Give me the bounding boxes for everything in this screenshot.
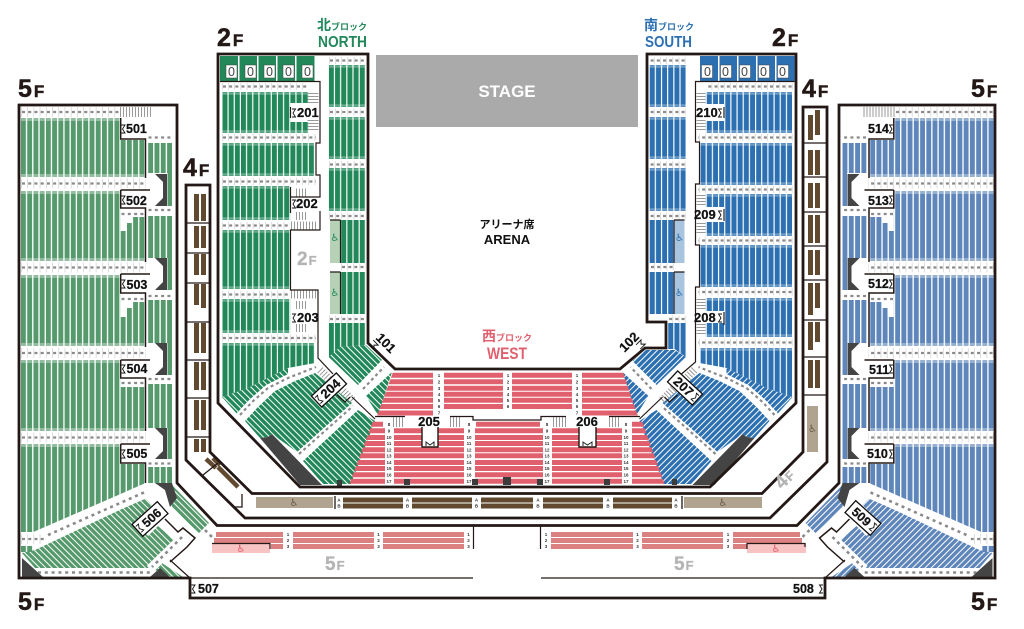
south 2F upper diagonal seats <box>726 368 792 415</box>
label 506: 506 <box>139 506 164 530</box>
west row numbers: 9 <box>625 428 628 434</box>
west row numbers: 8 <box>388 422 391 427</box>
north 2F column four <box>329 65 366 357</box>
west lower rows <box>340 424 670 481</box>
label 507: 507 <box>198 582 219 596</box>
north 2F seat number rows <box>222 60 385 456</box>
west stairs <box>393 417 621 427</box>
5F row numbers: 3 <box>377 544 380 549</box>
4F south accessible area <box>807 406 818 452</box>
west row numbers: 6 <box>507 404 510 409</box>
5F accessible area left <box>212 543 270 553</box>
5F row numbers: 3 <box>727 544 730 549</box>
5F pink rows <box>214 534 802 546</box>
west block heading: WEST <box>487 344 527 363</box>
west row numbers: 5 <box>576 398 579 403</box>
west row numbers: 11 <box>467 441 472 446</box>
4F accessible area left <box>256 497 333 508</box>
floor label 2F south: 2F <box>772 24 798 52</box>
label 205: 205 <box>418 414 440 429</box>
label 207: 207 <box>670 374 697 400</box>
south 5F dark wedges <box>838 174 992 577</box>
west row numbers: 13 <box>386 454 392 458</box>
south 2F top boxes band <box>700 56 794 81</box>
gate 206 cutout <box>579 427 596 447</box>
south 5F inner lines <box>820 118 894 562</box>
west block heading <box>482 328 532 363</box>
south 2F accessible areas <box>674 220 684 314</box>
4F row letters: B <box>475 504 479 508</box>
zero labels south: 0 <box>760 65 767 79</box>
west row numbers: 16 <box>623 472 629 478</box>
west row numbers: 10 <box>544 435 550 440</box>
5F row numbers: 1 <box>287 532 290 537</box>
west upper rows <box>370 375 645 413</box>
grey floor label 5F right: 5F <box>674 554 694 575</box>
arena label: アリーナ席 <box>480 217 534 231</box>
5F row numbers: 2 <box>545 538 548 543</box>
west row numbers: 4 <box>507 392 510 397</box>
label 209: 209 <box>694 207 716 222</box>
west row numbers: 1 <box>438 373 441 378</box>
west row numbers: 14 <box>466 460 472 465</box>
label 509 <box>845 501 881 535</box>
label 506 <box>132 502 168 536</box>
north 5F side columns <box>148 143 172 483</box>
west row numbers: 5 <box>438 398 441 403</box>
4F north diagonal seats <box>206 458 238 487</box>
4F accessible area right <box>684 497 762 508</box>
south block heading: SOUTH <box>645 34 692 51</box>
west row numbers: 14 <box>623 460 629 465</box>
north 5F inner lines <box>121 118 195 562</box>
label 510: 510 <box>867 447 888 461</box>
north 2F main columns <box>222 92 315 397</box>
4F row end lines <box>335 496 682 509</box>
floor label 5F bottom left: 5F <box>18 588 44 616</box>
5F row numbers: 2 <box>636 538 639 543</box>
wheelchair icons: ♿ <box>719 498 727 509</box>
5F row numbers: 1 <box>727 532 730 537</box>
zero labels south: 0 <box>704 65 711 79</box>
west row numbers: 10 <box>386 435 392 440</box>
label 101: 101 <box>373 330 399 356</box>
west row numbers: 6 <box>438 404 441 409</box>
4F row letters: A <box>475 498 479 502</box>
west row numbers: 17 <box>386 479 392 484</box>
west row numbers: 12 <box>466 448 472 452</box>
label 514: 514 <box>868 122 889 136</box>
west row numbers: 3 <box>576 386 579 391</box>
panel: north 5F seats <box>21 112 214 577</box>
4F row letters: B <box>674 504 678 508</box>
label 508 <box>793 582 823 596</box>
south 2F main columns <box>700 92 792 397</box>
wheelchair icons: ♿ <box>675 288 684 299</box>
west row numbers: 9 <box>388 428 391 434</box>
west row numbers: 15 <box>466 466 472 471</box>
west row numbers: 10 <box>466 435 472 440</box>
west row numbers: 5 <box>507 398 510 403</box>
zero labels south: 0 <box>741 65 748 79</box>
4F row letters: B <box>536 504 540 508</box>
south 2F lower diagonal seats <box>622 350 770 484</box>
arena label <box>480 217 534 247</box>
4F row letters: A <box>406 498 410 502</box>
west row numbers: 12 <box>544 448 550 452</box>
floor label 5F top left: 5F <box>18 75 44 103</box>
north block heading: 北ブロック <box>317 17 367 33</box>
5F accessible area right <box>747 543 806 553</box>
label 102: 102 <box>616 329 642 355</box>
4F brown rows <box>343 500 672 506</box>
north 5F diagonal block <box>22 485 209 577</box>
4F north brown columns <box>196 194 204 452</box>
label 509: 509 <box>849 505 874 529</box>
west row numbers: 7 <box>576 410 579 416</box>
5F row numbers: 2 <box>377 538 380 543</box>
4F row letters: A <box>606 498 610 502</box>
north 2F top boxes band <box>220 56 314 81</box>
west row numbers: 11 <box>545 441 550 446</box>
north 2F dark wedge <box>260 434 322 485</box>
label 206: 206 <box>576 414 598 429</box>
west row numbers: 1 <box>576 373 579 378</box>
west row numbers: 8 <box>625 422 628 427</box>
north 5F seat number rows <box>21 112 214 572</box>
north 2F upper diagonal seats <box>222 368 288 415</box>
4F north dividers <box>186 223 242 507</box>
label 508: 508 <box>793 582 814 596</box>
west row numbers: 8 <box>468 422 471 427</box>
wheelchair icons: ♿ <box>290 498 298 509</box>
floor label 4F left: 4F <box>183 154 209 182</box>
4F south dividers <box>803 143 827 395</box>
west row numbers: 17 <box>466 479 472 484</box>
north 2F zero boxes <box>226 65 313 78</box>
4F row letters: B <box>337 504 341 508</box>
south 2F dark wedge <box>692 434 754 485</box>
panel: south 2F seats <box>622 56 794 485</box>
floor label 5F bottom right: 5F <box>971 588 997 616</box>
west row numbers: 6 <box>576 404 579 409</box>
west row numbers: 11 <box>624 441 629 446</box>
stage <box>376 55 638 127</box>
5F row numbers: 3 <box>636 544 639 549</box>
west block lines <box>375 416 640 420</box>
floor label 4F right: 4F <box>802 75 828 103</box>
arena label: ARENA <box>484 232 531 247</box>
zero labels south: 0 <box>779 65 786 79</box>
west row numbers: 17 <box>544 479 550 484</box>
5F row numbers: 1 <box>545 532 548 537</box>
south block heading <box>644 17 694 51</box>
zero labels north: 0 <box>304 65 311 79</box>
south 5F diagonal block <box>806 485 992 577</box>
4F south brown columns <box>810 110 818 388</box>
west row numbers: 13 <box>544 454 550 458</box>
panel: 4F west brown rows <box>256 496 762 509</box>
wheelchair icons: ♿ <box>331 233 339 244</box>
label 201: 201 <box>297 105 319 120</box>
north 2F lower diagonal seats <box>245 345 392 484</box>
west row numbers: 16 <box>544 472 550 478</box>
5F row numbers: 3 <box>287 544 290 549</box>
5F row numbers: 3 <box>467 544 470 549</box>
north 2F inner lines <box>220 82 375 419</box>
panel: north 2F seats <box>220 56 392 485</box>
wheelchair icons: ♿ <box>237 544 245 555</box>
west row numbers: 4 <box>576 392 579 397</box>
label 208: 208 <box>694 310 716 325</box>
south 2F column four <box>648 65 686 357</box>
south 5F main columns <box>869 118 994 552</box>
south 2F zero boxes <box>702 65 788 78</box>
label 513: 513 <box>868 194 889 208</box>
west row numbers: 12 <box>623 448 629 452</box>
floor label 2F north: 2F <box>217 24 243 52</box>
west row numbers: 7 <box>438 410 441 416</box>
label 203: 203 <box>297 310 319 325</box>
west row numbers: 2 <box>507 380 510 384</box>
west row numbers: 14 <box>544 460 550 465</box>
5F row numbers: 1 <box>377 532 380 537</box>
panel: west arena block seats <box>337 373 677 486</box>
south 2F seat number rows <box>630 60 792 456</box>
west row numbers: 3 <box>438 386 441 391</box>
west row numbers: 15 <box>386 466 392 471</box>
zero labels north: 0 <box>266 65 273 79</box>
wheelchair icons: ♿ <box>772 544 780 555</box>
label 502: 502 <box>126 194 147 208</box>
zero labels north: 0 <box>247 65 254 79</box>
south 5F side columns <box>842 143 866 483</box>
gate 205 cutout <box>422 427 438 447</box>
west row numbers: 16 <box>466 472 472 478</box>
panel: 4F south brown seats <box>803 110 827 452</box>
5F row numbers: 2 <box>287 538 290 543</box>
4F row letters: A <box>536 498 540 502</box>
west row numbers: 4 <box>438 392 441 397</box>
floor label 5F top right: 5F <box>971 75 997 103</box>
west row numbers: 8 <box>546 422 549 427</box>
north block heading: NORTH <box>318 34 367 51</box>
west row numbers: 11 <box>387 441 392 446</box>
label 210: 210 <box>696 105 718 120</box>
wheelchair icons: ♿ <box>675 233 684 244</box>
4F row letters: A <box>674 498 678 502</box>
west row numbers: 2 <box>438 380 441 384</box>
west row numbers: 15 <box>544 466 550 471</box>
label 202: 202 <box>296 196 318 211</box>
west row numbers <box>386 373 629 484</box>
west row numbers: 13 <box>466 454 472 458</box>
5F pink area lines <box>212 544 805 549</box>
grey floor label 5F left: 5F <box>325 554 345 575</box>
panel: 5F west pink rows <box>212 532 806 553</box>
south 2F inner lines <box>640 82 794 419</box>
label 511: 511 <box>869 363 889 377</box>
zero labels north: 0 <box>285 65 292 79</box>
zero labels south: 0 <box>722 65 729 79</box>
label 501: 501 <box>126 122 147 136</box>
label 503: 503 <box>126 278 147 292</box>
west row numbers: 3 <box>507 386 510 391</box>
grey floor label 2F: 2F <box>297 249 317 270</box>
panel: south 5F seats <box>800 112 994 577</box>
west row numbers: 15 <box>623 466 629 471</box>
4F row letters: A <box>337 498 341 502</box>
label 204: 204 <box>317 375 344 402</box>
west block heading: 西ブロック <box>482 328 532 344</box>
south block heading: 南ブロック <box>644 17 694 33</box>
north block heading <box>317 17 367 51</box>
5F row numbers: 3 <box>545 544 548 549</box>
wheelchair icons <box>237 233 817 555</box>
label 207 <box>667 371 703 405</box>
5F row numbers: 1 <box>467 532 470 537</box>
west row numbers: 1 <box>507 373 510 378</box>
wheelchair icons: ♿ <box>331 288 339 299</box>
label 504: 504 <box>126 362 147 376</box>
label 505: 505 <box>126 447 147 461</box>
wheelchair icons: ♿ <box>808 424 817 435</box>
stage: STAGE <box>478 82 536 101</box>
zero labels south <box>704 65 786 79</box>
west row numbers: 17 <box>623 479 629 484</box>
west row numbers: 16 <box>386 472 392 478</box>
5F row numbers: 2 <box>727 538 730 543</box>
panel: 4F north brown seats <box>186 194 242 507</box>
4F row letters: B <box>606 504 610 508</box>
5F row numbers: 2 <box>467 538 470 543</box>
grey floor label 4F: 4F <box>771 465 799 494</box>
south 5F seat number rows <box>800 112 994 572</box>
4F row letters: B <box>406 504 410 508</box>
west row numbers: 12 <box>386 448 392 452</box>
zero labels north <box>228 65 311 79</box>
west row numbers: 9 <box>546 428 549 434</box>
west row numbers: 2 <box>576 380 579 384</box>
label 512: 512 <box>868 277 889 291</box>
west row numbers: 9 <box>468 428 471 434</box>
north 5F dark wedges <box>22 174 177 577</box>
north 5F main columns <box>21 118 146 552</box>
north 2F accessible areas <box>330 220 340 314</box>
west row numbers: 13 <box>623 454 629 458</box>
5F row numbers: 1 <box>636 532 639 537</box>
west row numbers: 10 <box>623 435 629 440</box>
west pillars <box>337 477 677 486</box>
zero labels north: 0 <box>228 65 235 79</box>
west row numbers: 14 <box>386 460 392 465</box>
label 204 <box>311 373 347 407</box>
